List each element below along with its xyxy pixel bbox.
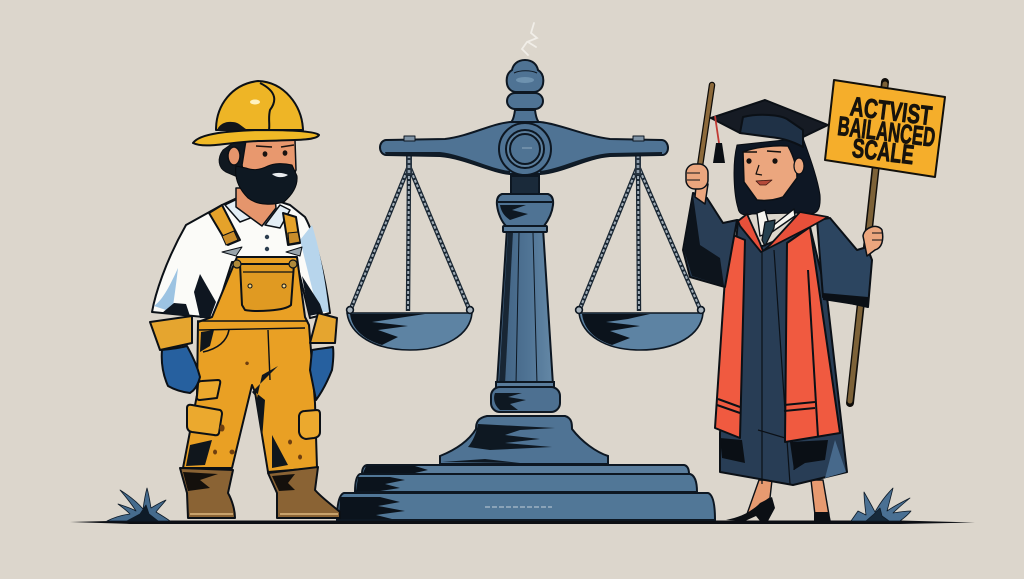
sign text <box>834 90 940 173</box>
red hood <box>738 212 828 252</box>
column <box>497 228 553 385</box>
sign pole <box>850 82 885 403</box>
high heel shoes <box>726 497 831 522</box>
tassel <box>713 116 725 163</box>
left sleeve <box>683 193 737 287</box>
smoke wisp above finial <box>522 23 537 55</box>
right sleeve <box>817 218 872 307</box>
right pan <box>576 307 704 350</box>
face <box>743 146 797 200</box>
finial <box>503 60 547 128</box>
right boot <box>268 467 340 518</box>
neck <box>236 188 276 226</box>
left stole <box>715 233 745 438</box>
moustache highlight <box>272 173 288 177</box>
left hanging chains <box>350 155 470 311</box>
icon: left grass tuft <box>107 488 170 521</box>
mortarboard cap <box>711 100 828 147</box>
right stole <box>784 227 840 442</box>
base step middle <box>355 474 697 492</box>
ground line <box>70 520 975 524</box>
face <box>242 140 296 182</box>
raised staff <box>700 85 712 166</box>
hard hat <box>193 81 319 145</box>
raised fist <box>686 164 708 204</box>
facial features <box>743 151 781 185</box>
base step top <box>362 465 689 474</box>
sign pole fill <box>850 84 885 401</box>
sign text: BAILANCED <box>836 111 937 153</box>
suspenders <box>209 205 302 256</box>
right hanging chains <box>579 155 701 311</box>
tie <box>762 220 775 246</box>
column collar <box>497 176 553 232</box>
shirt <box>152 192 330 318</box>
sign text: SCALE <box>850 133 916 170</box>
left cuff <box>150 316 192 350</box>
hair <box>734 138 820 215</box>
ear <box>228 147 240 165</box>
icon: right grass tuft <box>851 488 911 521</box>
hair <box>219 138 252 178</box>
white collar <box>757 209 795 236</box>
sign text: ACTVIST <box>849 91 934 131</box>
base ring <box>491 382 560 412</box>
base step bottom <box>337 493 715 520</box>
balance scale <box>337 23 715 520</box>
eyes and brows <box>256 145 294 157</box>
beam <box>380 122 668 174</box>
right glove <box>310 347 333 400</box>
beard <box>236 164 297 204</box>
left pan <box>347 307 473 350</box>
left boot <box>180 468 235 518</box>
left glove <box>162 346 200 393</box>
lower hand <box>863 226 883 256</box>
foot <box>440 416 608 464</box>
gown body <box>720 220 847 485</box>
beam pivot disc <box>499 123 551 175</box>
legs <box>747 480 829 515</box>
right cuff <box>310 313 337 343</box>
graduate figure <box>683 80 945 522</box>
ear <box>794 158 804 174</box>
protest sign <box>825 80 945 177</box>
worker figure <box>150 81 340 518</box>
overalls <box>183 257 320 472</box>
